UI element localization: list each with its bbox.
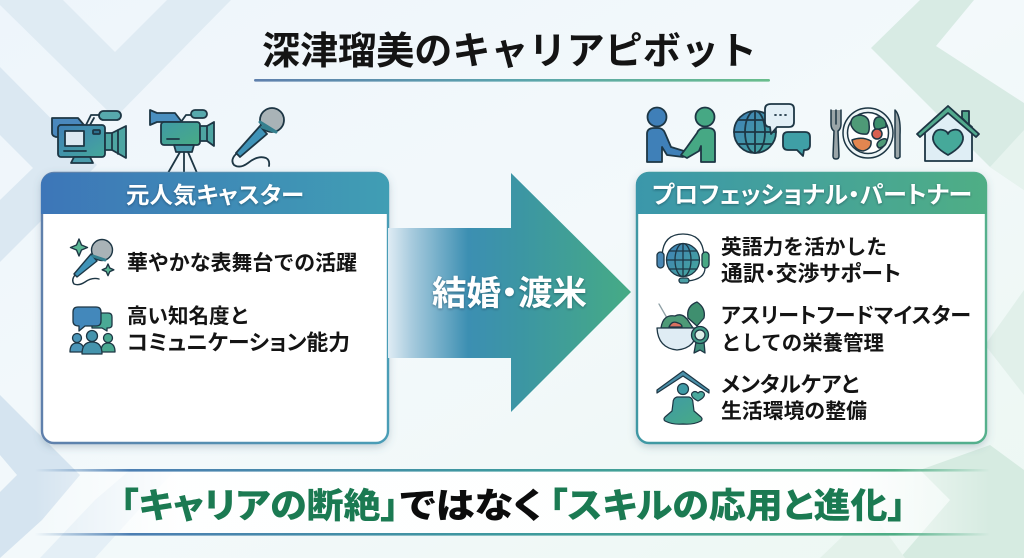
heading: former caster: 元人気キャスター: [126, 182, 304, 208]
panel: professional partner: [636, 173, 987, 443]
title: 深津瑠美のキャリアピボット: [262, 31, 757, 73]
panel header: [41, 173, 389, 214]
text: interpreting and negotiation: [721, 236, 901, 286]
icon: salad bowl with badge: [657, 302, 708, 353]
icon: home with heart: [917, 106, 979, 161]
text: interpreting and negotiation: 通訳・交渉サポート: [721, 262, 901, 286]
text: nutrition management: [721, 304, 971, 355]
text: stage activity: 華やかな表舞台での活躍: [127, 252, 357, 275]
icon: camera on tripod: [150, 110, 214, 173]
icon: handshake: [647, 108, 715, 162]
icon: microphone: [232, 108, 284, 167]
text: name recognition: 高い知名度と: [127, 305, 250, 328]
conclusion text: [120, 487, 906, 526]
text: nutrition management: アスリートフードマイスター: [721, 304, 971, 328]
icon: microphone with sparkles: [70, 239, 114, 285]
arrow label: 結婚・渡米: [432, 275, 587, 313]
bottom message band: [35, 469, 990, 536]
icon: meditation under a roof: [657, 371, 709, 424]
conclusion text: ではなく: [400, 487, 542, 526]
text: interpreting and negotiation: 英語力を活かした: [721, 236, 887, 259]
arrow: marriage and move: [388, 173, 631, 412]
panel header: [636, 173, 987, 214]
conclusion text: 「スキルの応用と進化」: [549, 487, 906, 526]
heading: professional partner: プロフェッショナル・パートナー: [652, 182, 972, 209]
icon: globe and speech bubbles: [734, 104, 810, 156]
text: mental care and living environment: [721, 373, 867, 423]
text: nutrition management: としての栄養管理: [721, 332, 884, 355]
conclusion text: 「キャリアの断絶」: [120, 487, 399, 526]
text: name recognition: コミュニケーション能力: [127, 331, 350, 355]
text: mental care and living environment: 生活環境の整備: [721, 400, 867, 423]
icon: video camera: [52, 111, 126, 163]
panel: former caster: [41, 173, 389, 443]
icon: globe with headset: [657, 234, 709, 283]
icon: plate and cutlery: [831, 108, 900, 159]
text: name recognition: [127, 305, 350, 355]
text: mental care and living environment: メンタルケアと: [721, 373, 859, 397]
icon: conversation and audience: [70, 307, 115, 354]
